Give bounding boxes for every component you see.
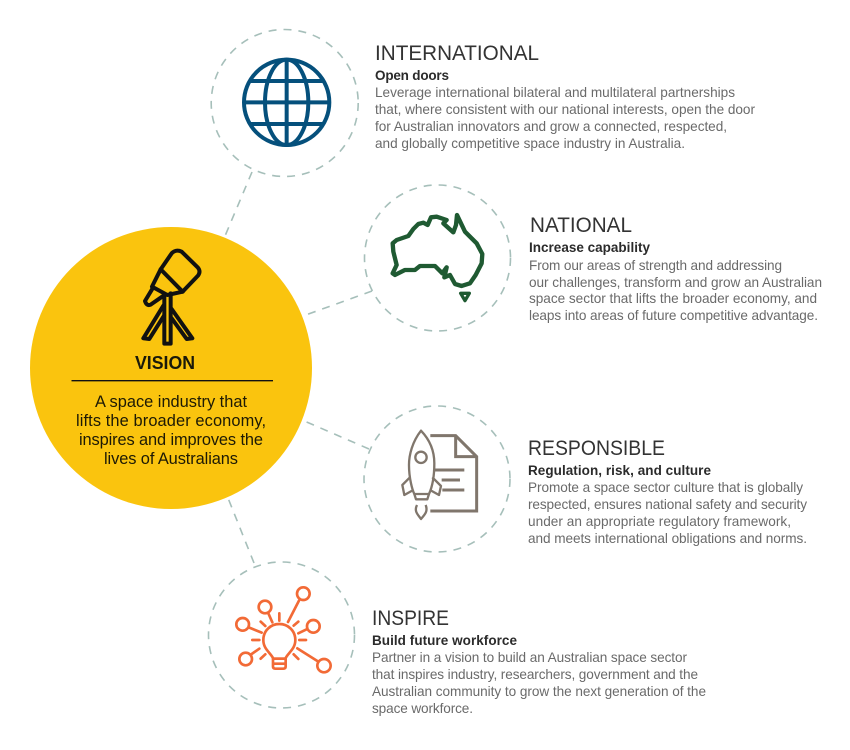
icon: Australia map	[393, 215, 482, 301]
body text: national: From our areas of strength and addressing	[529, 258, 782, 273]
body text: national: our challenges, transform and grow an Australian	[529, 275, 822, 290]
panel: international	[211, 30, 755, 176]
vision statement: A space industry that	[95, 393, 247, 411]
body text: international: that, where consistent with our national interests, open the door	[375, 102, 755, 117]
panel: vision	[30, 227, 312, 509]
icon: telescope	[143, 251, 199, 344]
body text: inspire: Partner in a vision to build an Australian space sector	[372, 650, 687, 665]
subheading: open doors: Open doors	[375, 68, 449, 83]
vision statement: lifts the broader economy,	[76, 412, 266, 430]
heading: responsible: RESPONSIBLE	[528, 437, 665, 460]
body text: responsible: under an appropriate regulatory framework,	[528, 514, 791, 529]
body text: responsible: respected, ensures national safety and security	[528, 497, 807, 512]
subheading: build future workforce: Build future workforce	[372, 633, 517, 648]
body text: inspire: that inspires industry, researchers, government and the	[372, 667, 698, 682]
panel: inspire	[208, 562, 706, 716]
yellow circle	[30, 227, 312, 509]
heading: national: NATIONAL	[530, 214, 632, 237]
panel: national	[364, 185, 822, 331]
body text: national	[529, 258, 822, 323]
connector: vision to inspire	[228, 498, 254, 563]
connector: vision to national	[303, 291, 372, 316]
body text: international: Leverage international bilateral and multilateral partnerships	[375, 85, 735, 100]
icon: light bulb network	[236, 587, 331, 672]
vision statement: lives of Australians	[104, 450, 238, 468]
body text: inspire: Australian community to grow the next generation of the	[372, 684, 706, 699]
dashed circle	[208, 562, 354, 708]
body text: international	[375, 85, 755, 151]
vision statement	[76, 393, 266, 468]
icon: rocket and document	[402, 431, 477, 519]
subheading: increase capability: Increase capability	[529, 240, 650, 255]
heading: inspire: INSPIRE	[372, 607, 449, 630]
dashed circle	[211, 30, 358, 176]
body text: responsible: and meets international obligations and norms.	[528, 531, 807, 546]
body text: responsible	[528, 480, 807, 546]
heading: international: INTERNATIONAL	[375, 42, 539, 65]
dashed circle	[364, 406, 510, 552]
body text: international: for Australian innovators and grow a connected, respected,	[375, 119, 727, 134]
dashed circle	[364, 185, 510, 331]
subheading: regulation, risk, and culture: Regulation, risk, and culture	[528, 463, 711, 478]
body text: national: leaps into areas of future competitive advantage.	[529, 308, 818, 323]
body text: national: space sector that lifts the broader economy, and	[529, 291, 817, 306]
body text: inspire	[372, 650, 706, 716]
connector: vision to international	[225, 172, 252, 236]
vision statement: inspires and improves the	[79, 431, 263, 449]
divider rule	[72, 380, 273, 382]
body text: inspire: space workforce.	[372, 701, 473, 716]
body text: international: and globally competitive space industry in Australia.	[375, 136, 685, 151]
heading: VISION: VISION	[135, 353, 195, 373]
connector: vision to responsible	[302, 420, 369, 449]
icon: globe	[244, 60, 329, 145]
body text: responsible: Promote a space sector culture that is globally	[528, 480, 803, 495]
panel: responsible	[364, 406, 807, 552]
